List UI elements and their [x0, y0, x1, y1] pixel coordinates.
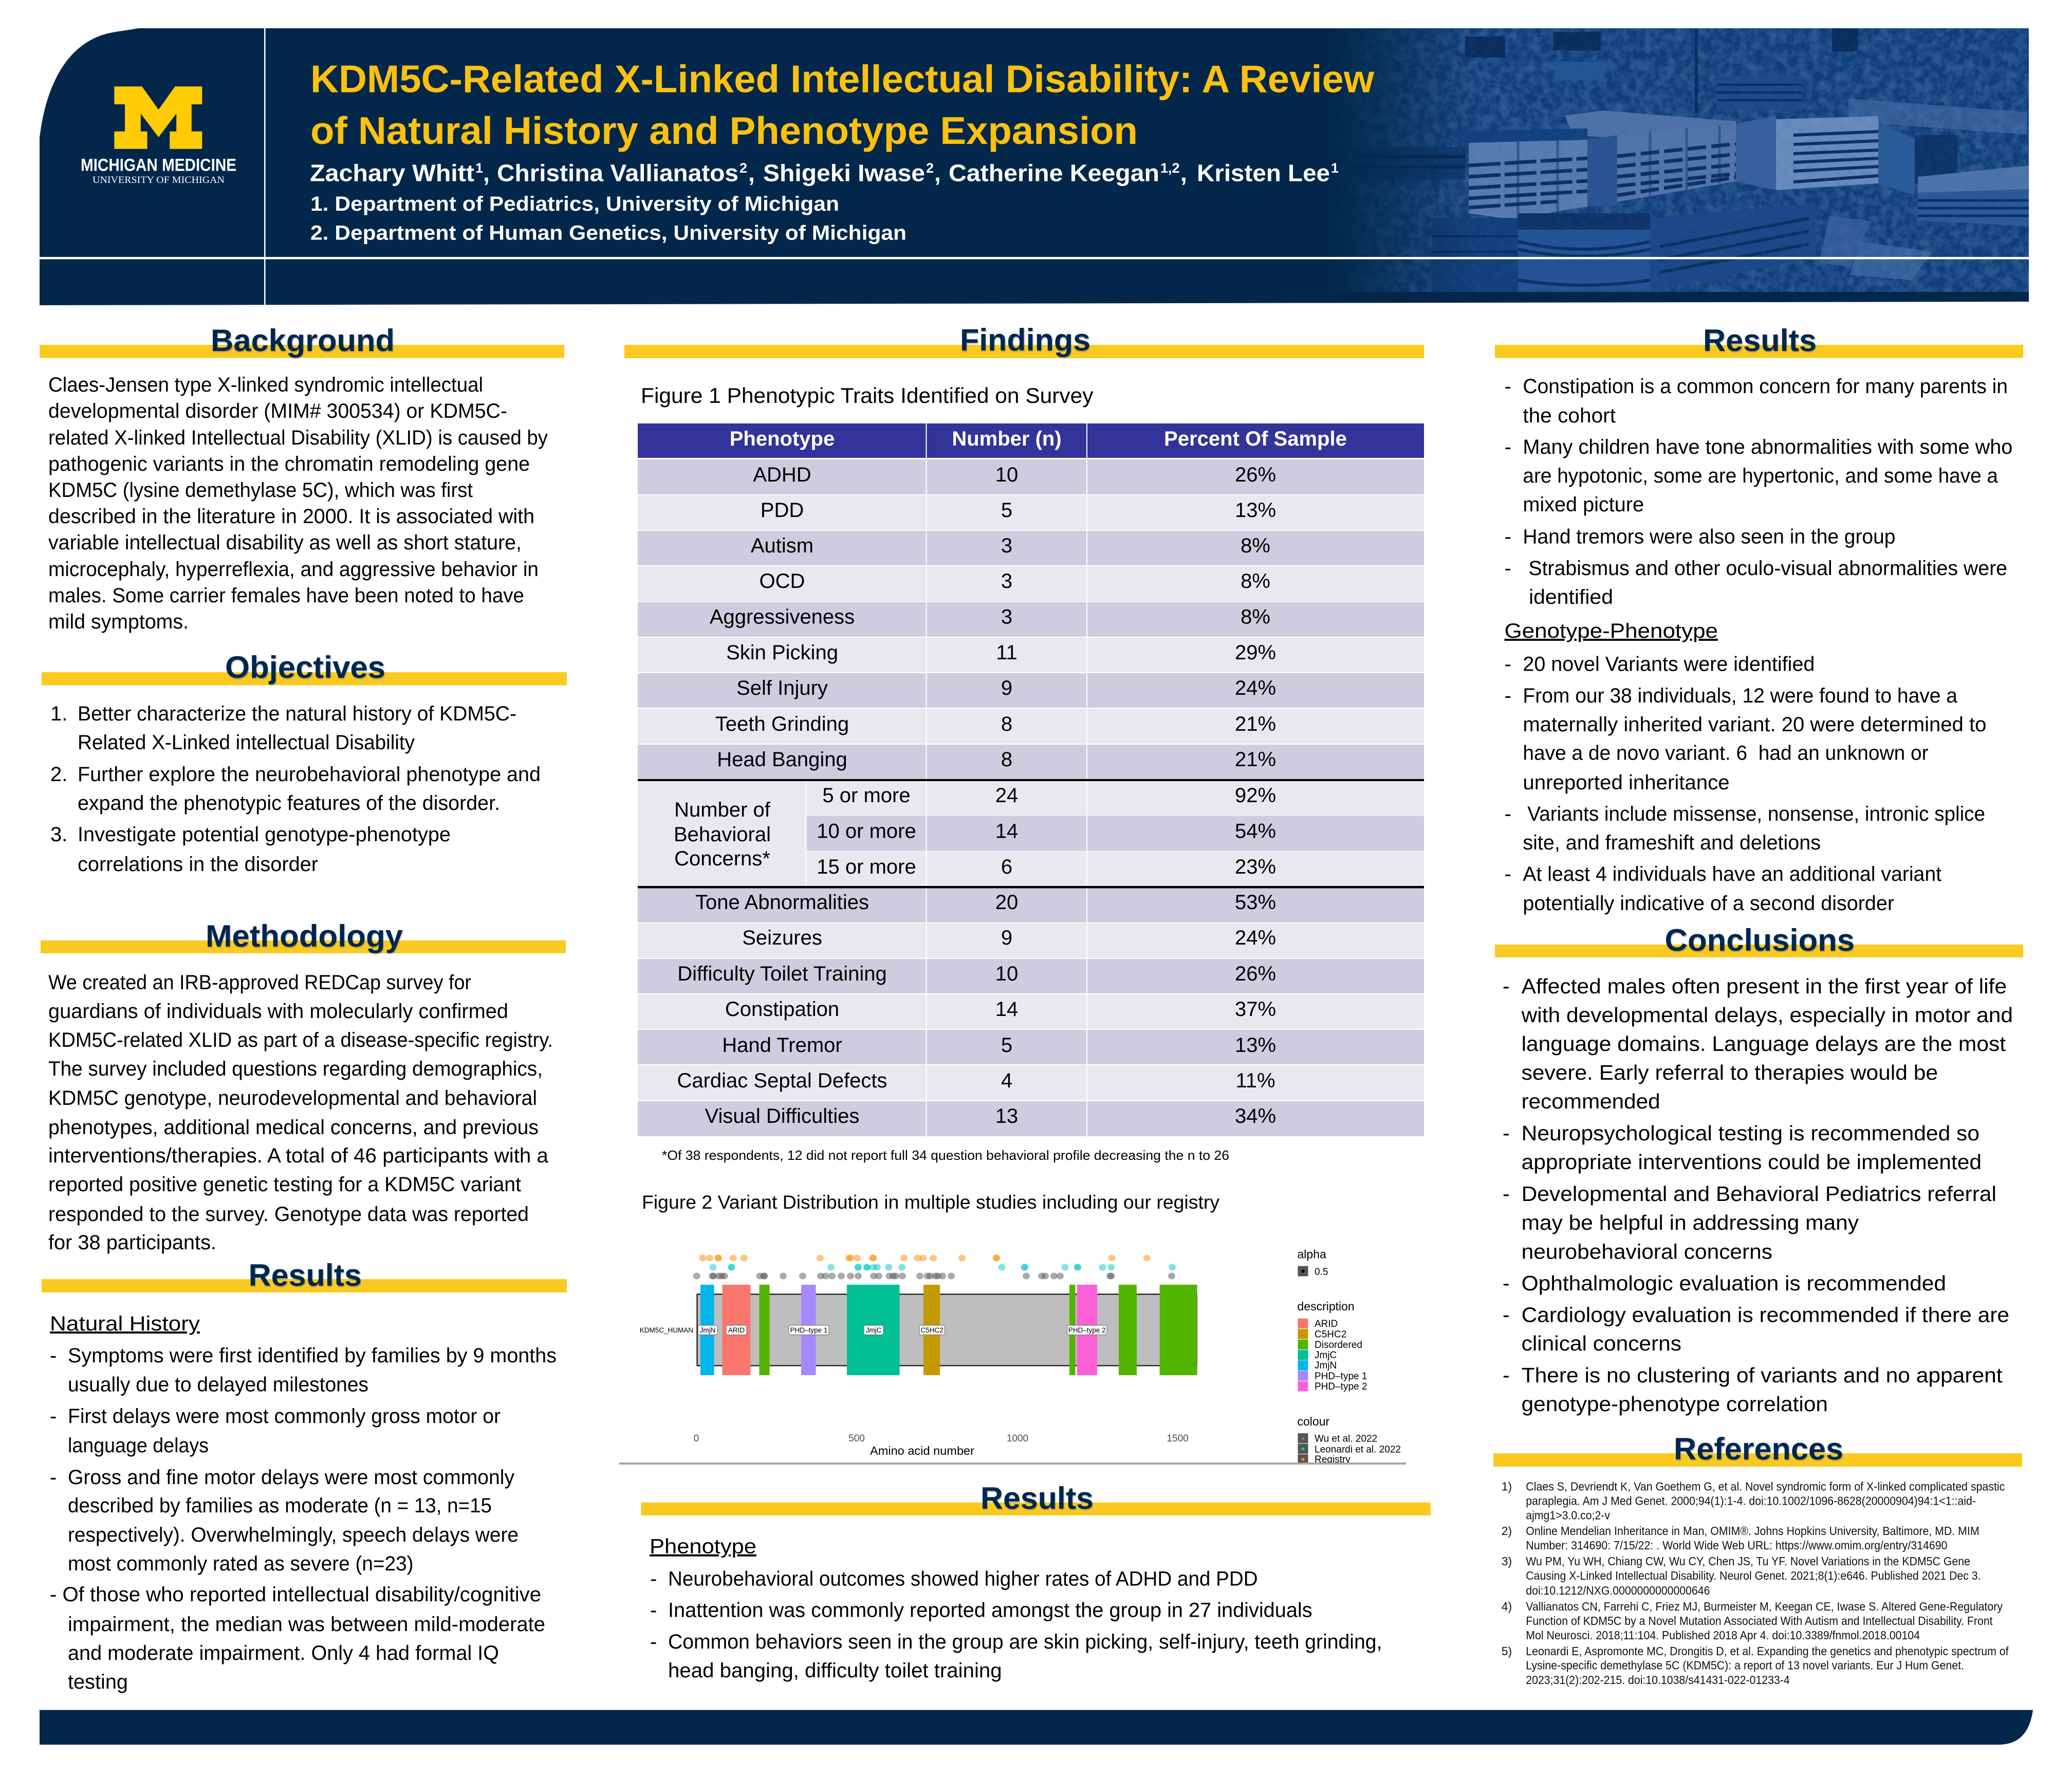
list: references: 2): [1502, 1524, 1512, 1538]
header banner: [40, 28, 2029, 306]
table: phenotypic traits: 10: [995, 963, 1018, 985]
table: phenotypic traits: 5 or more: [822, 784, 911, 807]
table: phenotypic traits: 5: [1001, 499, 1012, 522]
list: conclusions: language domains. Language delays are the most: [1522, 1032, 2006, 1056]
table: phenotypic traits: Autism: [751, 534, 813, 557]
text: methodology paragraph: reported positive genetic testing for a KDM5C variant: [48, 1173, 521, 1196]
figure 2 caption: Figure 2 Variant Distribution in multiple studies including our registry: [642, 1192, 1219, 1213]
authors: 2: [739, 160, 747, 176]
table: phenotypic traits: 13%: [1235, 1034, 1276, 1057]
heading: results: Results: [980, 1481, 1094, 1515]
x axis: Amino acid number: [870, 1444, 974, 1457]
list: genotype results: unreported inheritance: [1523, 771, 1730, 794]
panel: results natural history: [42, 1258, 567, 1693]
panel: background: [40, 323, 564, 633]
panel: objectives: [42, 650, 567, 876]
table: phenotypic traits: 20: [995, 891, 1018, 914]
list: genotype results: From our 38 individuals, 12 were found to have a: [1523, 684, 1958, 707]
heading: references: References: [1674, 1432, 1843, 1466]
heading: background: [40, 323, 564, 358]
heading: results: Results: [1703, 323, 1817, 358]
authors: 1,2: [1160, 160, 1180, 176]
table: phenotypic traits: 5: [1001, 1034, 1012, 1057]
list: conclusions: -: [1503, 1271, 1510, 1295]
legend: description: JmjN: [1315, 1360, 1337, 1371]
text: background paragraph: pathogenic variants in the chromatin remodeling gene: [48, 453, 530, 475]
table: phenotypic traits: 6: [1001, 856, 1012, 878]
domain labels: ARID: [728, 1326, 745, 1334]
list: phenotype results: -: [650, 1631, 657, 1653]
table: phenotypic traits: 13%: [1235, 499, 1276, 522]
list: phenotype results: [650, 1568, 1382, 1682]
table: phenotypic traits: 92%: [1235, 784, 1276, 807]
list: conclusions: -: [1503, 974, 1510, 998]
list: clinical results: -: [1505, 375, 1511, 398]
list: references: Lysine-specific demethylase 5C (KDM5C): a report of 13 novel variants. Eur J Hum Genet.: [1526, 1659, 1964, 1672]
list: phenotype results: Neurobehavioral outcomes showed higher rates of ADHD and PDD: [668, 1568, 1258, 1590]
list: natural history findings: Gross and fine motor delays were most commonly: [68, 1466, 514, 1489]
list: conclusions: appropriate interventions could be implemented: [1522, 1150, 1982, 1174]
footer band: [40, 1710, 2033, 1745]
table: phenotypic traits: Visual Difficulties: [705, 1105, 859, 1127]
list: genotype results: -: [1505, 684, 1511, 707]
list: natural history findings: impairment, the median was between mild-moderate: [68, 1613, 545, 1636]
domain labels: KDM5C_HUMAN: [640, 1326, 693, 1334]
list: natural history findings: and moderate impairment. Only 4 had formal IQ: [68, 1642, 499, 1664]
list: conclusions: Ophthalmologic evaluation is recommended: [1522, 1271, 1946, 1295]
table: phenotypic traits: 23%: [1235, 856, 1276, 878]
table: phenotypic traits: Seizures: [742, 927, 822, 949]
subheading: genotype-phenotype: Genotype-Phenotype: [1505, 620, 1718, 642]
domain labels: PHD–type 1: [790, 1326, 827, 1334]
title: [310, 58, 1375, 152]
list: objectives: 1.: [50, 702, 67, 725]
table: phenotypic traits: 13: [995, 1105, 1018, 1127]
list: genotype results: At least 4 individuals have an additional variant: [1523, 863, 1941, 885]
table: phenotypic traits: Skin Picking: [726, 641, 838, 664]
list: clinical results: the cohort: [1523, 404, 1616, 427]
affiliations: 1. Department of Pediatrics, University of Michigan: [310, 193, 839, 215]
title: KDM5C-Related X-Linked Intellectual Disability: A Review: [310, 58, 1375, 101]
authors: 2: [926, 160, 934, 176]
text: background paragraph: [48, 374, 548, 633]
list: references: 4): [1502, 1600, 1512, 1613]
table: phenotypic traits: 26%: [1235, 464, 1276, 486]
affiliations: 2. Department of Human Genetics, University of Michigan: [310, 222, 906, 245]
text: background paragraph: described in the literature in 2000. It is associated with: [48, 505, 534, 528]
list: natural history findings: usually due to delayed milestones: [68, 1373, 368, 1396]
protein body and domains: [697, 1285, 1197, 1375]
legend: description: ARID: [1315, 1319, 1338, 1329]
variant dots: registry: [699, 1255, 1151, 1261]
text: background paragraph: mild symptoms.: [48, 610, 189, 633]
table: phenotypic traits: 3: [1001, 605, 1012, 628]
text: background paragraph: Claes-Jensen type X-linked syndromic intellectual: [48, 374, 483, 396]
logo: Michigan Medicine: UNIVERSITY OF MICHIGAN: [92, 175, 225, 186]
list: phenotype results: head banging, difficulty toilet training: [668, 1659, 1002, 1682]
list: references: Vallianatos CN, Farrehi C, Friez MJ, Burmeister M, Keegan CE, Iwase S. Altered Gene-Regulatory: [1526, 1600, 2003, 1613]
domain labels: C5HC2: [921, 1326, 943, 1334]
table: phenotypic traits: Difficulty Toilet Training: [677, 963, 887, 985]
text: methodology paragraph: The survey included questions regarding demographics,: [48, 1058, 543, 1080]
list: conclusions: neurobehavioral concerns: [1522, 1239, 1772, 1263]
table: phenotypic traits: 8: [1001, 748, 1012, 771]
legend: colour: colour: [1297, 1415, 1329, 1428]
list: conclusions: genotype-phenotype correlation: [1522, 1392, 1828, 1416]
list: objectives: Better characterize the natural history of KDM5C-: [78, 702, 516, 725]
list: conclusions: -: [1503, 1303, 1510, 1327]
heading: conclusions: Conclusions: [1665, 923, 1855, 957]
authors: Christina Vallianatos: [497, 160, 738, 187]
table: phenotypic traits: 24%: [1235, 677, 1276, 699]
table: phenotypic traits: 10 or more: [817, 820, 916, 843]
list: objectives: 2.: [50, 763, 67, 786]
table: phenotypic traits: Tone Abnormalities: [695, 891, 869, 914]
list: conclusions: may be helpful in addressing many: [1522, 1211, 1859, 1234]
list: conclusions: Developmental and Behavioral Pediatrics referral: [1522, 1182, 1996, 1206]
list: natural history findings: testing: [68, 1671, 128, 1693]
list: conclusions: There is no clustering of variants and no apparent: [1522, 1363, 2003, 1387]
subheading: natural history: Natural History: [50, 1312, 200, 1335]
text: background paragraph: KDM5C (lysine demethylase 5C), which was first: [48, 479, 473, 502]
table: phenotypic traits: 11%: [1235, 1069, 1275, 1092]
list: objectives: correlations in the disorder: [78, 853, 318, 876]
x axis: 1500: [1167, 1433, 1189, 1444]
table: phenotypic traits: 54%: [1235, 820, 1276, 843]
list: genotype results: -: [1505, 863, 1511, 885]
table: phenotypic traits: 14: [995, 998, 1018, 1021]
text: methodology paragraph: interventions/therapies. A total of 46 participants with a: [48, 1144, 549, 1167]
list: genotype results: -: [1505, 803, 1511, 825]
list: genotype results: -: [1505, 653, 1511, 675]
list: objectives: expand the phenotypic features of the disorder.: [78, 792, 500, 815]
table footnote: *Of 38 respondents, 12 did not report full 34 question behavioral profile decreasing the n to 26: [662, 1148, 1229, 1163]
table: phenotypic traits: 3: [1001, 534, 1012, 557]
variant dots: Wu et al.: [693, 1272, 1175, 1280]
list: conclusions: recommended: [1522, 1089, 1660, 1113]
table: phenotypic traits: 21%: [1235, 713, 1276, 735]
list: conclusions: Affected males often present in the first year of life: [1522, 974, 2007, 998]
table: phenotypic traits: 37%: [1235, 998, 1276, 1021]
text: methodology paragraph: KDM5C-related XLID as part of a disease-specific registry.: [48, 1029, 553, 1051]
list: genotype results: have a de novo variant. 6 had an unknown or: [1523, 742, 1929, 765]
list: genotype results: potentially indicative of a second disorder: [1523, 892, 1894, 915]
domain labels: JmjN: [700, 1326, 715, 1334]
legend: description: PHD–type 2: [1315, 1381, 1367, 1392]
heading: results: [1495, 323, 2023, 358]
list: references: Online Mendelian Inheritance in Man, OMIM®. Johns Hopkins University, Baltimore, MD. MIM: [1526, 1524, 1979, 1538]
legend: colour: [1297, 1415, 1401, 1465]
panel: conclusions: [1495, 923, 2023, 1416]
list: clinical results: Many children have tone abnormalities with some who: [1523, 436, 2012, 458]
table: phenotypic traits: 15 or more: [817, 856, 916, 878]
list: references: 3): [1502, 1555, 1512, 1568]
list: references: Number: 314690: 7/15/22: . World Wide Web URL: https://www.omim.org/entry/314690: [1526, 1539, 1948, 1552]
heading: methodology: Methodology: [206, 919, 403, 953]
text: methodology paragraph: KDM5C genotype, neurodevelopmental and behavioral: [48, 1087, 537, 1109]
legend: colour: Registry: [1315, 1454, 1350, 1465]
table: phenotypic traits: Self Injury: [736, 677, 828, 699]
list: phenotype results: -: [650, 1568, 657, 1590]
list: clinical results: identified: [1529, 586, 1613, 608]
list: conclusions: [1503, 974, 2013, 1416]
list: references: ajmg1>3.0.co;2-v: [1526, 1509, 1610, 1522]
text: methodology paragraph: guardians of individuals with molecularly confirmed: [48, 1000, 508, 1023]
list: conclusions: -: [1503, 1363, 1510, 1387]
list: conclusions: clinical concerns: [1522, 1331, 1681, 1355]
list: natural history findings: most commonly rated as severe (n=23): [68, 1552, 413, 1575]
table: phenotypic traits: 24: [995, 784, 1018, 807]
panel: results genotype: [1495, 323, 2023, 915]
text: methodology paragraph: phenotypes, additional medical concerns, and previous: [48, 1116, 539, 1139]
panel: references: [1493, 1432, 2022, 1687]
heading: findings: [624, 323, 1424, 358]
text: methodology paragraph: [48, 971, 553, 1254]
list: conclusions: with developmental delays, especially in motor and: [1521, 1003, 2013, 1027]
list: references: Wu PM, Yu WH, Chiang CW, Wu CY, Chen JS, Tu YF. Novel Variations in the KDM5C Gene: [1526, 1555, 1970, 1568]
chart: variant distribution on KDM5C protein: [619, 1248, 1406, 1465]
list: clinical results: mixed picture: [1523, 493, 1644, 516]
table: phenotypic traits: Hand Tremor: [722, 1034, 842, 1057]
heading: results: [641, 1481, 1431, 1515]
panel: findings: [619, 323, 1424, 1465]
list: natural history findings: [50, 1344, 557, 1693]
table: phenotypic traits: 9: [1001, 677, 1012, 699]
hospital photo: [1285, 28, 2029, 292]
table: phenotypic traits: Behavioral: [674, 823, 771, 846]
list: references: doi:10.1212/NXG.0000000000000646: [1526, 1584, 1710, 1597]
text: methodology paragraph: for 38 participants.: [48, 1231, 216, 1254]
list: natural history findings: -: [50, 1344, 57, 1367]
legend: colour: Wu et al. 2022: [1315, 1434, 1377, 1445]
list: conclusions: Neuropsychological testing is recommended so: [1522, 1121, 1979, 1145]
logo: Michigan Medicine: MICHIGAN MEDICINE: [81, 156, 236, 175]
list: genotype results: site, and frameshift and deletions: [1523, 831, 1821, 854]
table: phenotypic traits: Phenotype: [730, 428, 835, 450]
list: natural history findings: First delays were most commonly gross motor or: [68, 1405, 501, 1428]
table: phenotypic traits: Number of: [674, 799, 771, 821]
table: phenotypic traits: Number (n): [952, 428, 1062, 450]
authors: ,: [483, 160, 490, 187]
logo: Michigan Medicine: [81, 86, 236, 186]
list: genotype results: 20 novel Variants were identified: [1523, 653, 1815, 675]
authors: Catherine Keegan: [949, 160, 1159, 187]
list: references: [1502, 1480, 2009, 1687]
table: phenotypic traits: Head Banging: [717, 748, 847, 771]
list: references: Leonardi E, Aspromonte MC, Drongitis D, et al. Expanding the genetics and phenotypic spectrum of: [1526, 1644, 2009, 1658]
legend: alpha: 0.5: [1315, 1267, 1328, 1278]
authors: Shigeki Iwase: [763, 160, 925, 187]
table: phenotypic traits: PDD: [761, 499, 804, 522]
list: clinical results: -: [1505, 526, 1511, 548]
list: clinical results: -: [1505, 436, 1511, 458]
x axis: 1000: [1007, 1433, 1028, 1444]
list: references: Causing X-Linked Intellectual Disability. Neurol Genet. 2021;8(1):e646. Published 2021 Dec 3.: [1526, 1569, 1981, 1582]
legend: colour: Leonardi et al. 2022: [1315, 1444, 1401, 1455]
panel: methodology: [41, 919, 566, 1254]
legend: description: PHD–type 1: [1315, 1371, 1367, 1382]
list: genotype results: maternally inherited variant. 20 were determined to: [1523, 713, 1986, 736]
legend: alpha: [1297, 1248, 1328, 1278]
x axis: 500: [848, 1433, 865, 1444]
authors: Kristen Lee: [1197, 160, 1330, 187]
table: phenotypic traits: 21%: [1235, 748, 1276, 771]
table: phenotypic traits: 53%: [1235, 891, 1276, 914]
heading: objectives: Objectives: [225, 650, 385, 684]
list: natural history findings: -: [50, 1466, 57, 1489]
heading: results: [42, 1258, 567, 1292]
list: genotype results: Variants include missense, nonsense, intronic splice: [1527, 803, 1985, 825]
heading: methodology: [41, 919, 566, 953]
text: methodology paragraph: We created an IRB-approved REDCap survey for: [48, 971, 471, 994]
text: methodology paragraph: responded to the survey. Genotype data was reported: [48, 1203, 529, 1226]
legend: description: [1297, 1300, 1367, 1392]
heading: results: Results: [249, 1258, 362, 1292]
table: phenotypic traits: 8%: [1241, 605, 1270, 628]
list: natural history findings: respectively). Overwhelmingly, speech delays were: [68, 1524, 519, 1546]
list: genotype results: [1505, 653, 1986, 915]
list: natural history findings: described by families as moderate (n = 13, n=15: [68, 1494, 492, 1517]
table: phenotypic traits: 24%: [1235, 927, 1276, 949]
legend: description: Disordered: [1315, 1340, 1362, 1350]
domain labels: PHD–type 2: [1068, 1326, 1106, 1334]
domain labels: JmjC: [866, 1326, 882, 1334]
authors: 1: [1331, 160, 1339, 176]
text: background paragraph: males. Some carrier females have been noted to have: [48, 584, 524, 607]
heading: findings: Findings: [960, 323, 1090, 357]
list: references: Claes S, Devriendt K, Van Goethem G, et al. Novel syndromic form of X-linked complicated spastic: [1526, 1480, 2005, 1493]
list: clinical results: Constipation is a common concern for many parents in: [1523, 375, 2008, 398]
text: background paragraph: microcephaly, hyperreflexia, and aggressive behavior in: [48, 558, 539, 581]
table: phenotypic traits: Cardiac Septal Defects: [677, 1069, 887, 1092]
affiliations: [310, 193, 906, 245]
list: phenotype results: Common behaviors seen in the group are skin picking, self-injury, teeth grinding,: [668, 1631, 1382, 1653]
table: phenotypic traits: 29%: [1235, 641, 1276, 664]
authors: ,: [1180, 160, 1187, 187]
table: phenotypic traits: Teeth Grinding: [715, 713, 849, 735]
list: natural history findings: Symptoms were first identified by families by 9 months: [68, 1344, 557, 1367]
list: natural history findings: language delays: [68, 1434, 209, 1457]
table: phenotypic traits: 10: [995, 464, 1018, 486]
legend: description: JmjC: [1315, 1350, 1337, 1361]
list: objectives: Related X-Linked intellectual Disability: [78, 731, 415, 754]
list: phenotype results: -: [650, 1599, 657, 1622]
legend: description: C5HC2: [1315, 1329, 1346, 1340]
list: conclusions: -: [1503, 1182, 1510, 1206]
panel: results phenotype: [641, 1481, 1431, 1682]
list: objectives: Further explore the neurobehavioral phenotype and: [78, 763, 541, 786]
table: phenotypic traits: Aggressiveness: [710, 605, 855, 628]
x axis: 0: [694, 1433, 699, 1444]
list: references: paraplegia. Am J Med Genet. 2000;94(1):1-4. doi:10.1002/1096-8628(20000904)94:1<1::aid-: [1526, 1494, 1976, 1508]
table: phenotypic traits: 8: [1001, 713, 1012, 735]
list: references: Mol Neurosci. 2018;11:104. Published 2018 Apr 4. doi:10.3389/fnmol.2018.00104: [1526, 1629, 1920, 1642]
table: phenotypic traits: 26%: [1235, 963, 1276, 985]
table: phenotypic traits: 8%: [1241, 534, 1270, 557]
heading: background: Background: [211, 323, 395, 358]
list: references: 5): [1502, 1644, 1512, 1658]
list: clinical results: [1505, 375, 2012, 608]
legend: description: description: [1297, 1300, 1355, 1313]
authors: [310, 160, 1339, 187]
list: objectives: Investigate potential genotype-phenotype: [78, 823, 451, 846]
table: phenotypic traits: 9: [1001, 927, 1012, 949]
list: references: 2023;31(2):202-215. doi:10.1038/s41431-022-01233-4: [1526, 1673, 1790, 1687]
title: of Natural History and Phenotype Expansion: [310, 109, 1138, 152]
list: clinical results: are hypotonic, some are hypertonic, and some have a: [1523, 465, 1999, 487]
list: references: 1): [1502, 1480, 1512, 1493]
authors: ,: [748, 160, 755, 187]
table: phenotypic traits: [638, 423, 1424, 1136]
table: phenotypic traits: 3: [1001, 570, 1012, 593]
list: phenotype results: Inattention was commonly reported amongst the group in 27 individuals: [668, 1599, 1312, 1622]
list: clinical results: Hand tremors were also seen in the group: [1523, 526, 1895, 548]
list: clinical results: Strabismus and other oculo-visual abnormalities were: [1528, 557, 2007, 580]
table: phenotypic traits: Percent Of Sample: [1164, 428, 1347, 450]
table: phenotypic traits: 34%: [1235, 1105, 1276, 1127]
heading: objectives: [42, 650, 567, 686]
list: conclusions: -: [1503, 1121, 1510, 1145]
table: phenotypic traits: 14: [995, 820, 1018, 843]
list: natural history findings: -: [50, 1405, 57, 1428]
authors: Zachary Whitt: [310, 160, 474, 187]
header grid lines: [40, 28, 2029, 306]
table: phenotypic traits: 11: [996, 641, 1017, 664]
authors: 1: [475, 160, 483, 176]
text: background paragraph: variable intellectual disability as well as short stature,: [48, 531, 522, 554]
table: phenotypic traits: ADHD: [753, 464, 811, 486]
figure 1 caption: Figure 1 Phenotypic Traits Identified on Survey: [641, 383, 1094, 408]
domain labels: [640, 1325, 1107, 1335]
heading: references: [1493, 1432, 2022, 1467]
list: objectives: 3.: [50, 823, 67, 846]
table: phenotypic traits: Concerns*: [674, 847, 770, 870]
list: objectives: [50, 702, 541, 876]
text: background paragraph: related X-linked Intellectual Disability (XLID) is caused by: [48, 427, 548, 449]
list: natural history findings: - Of those who reported intellectual disability/cognitive: [50, 1583, 541, 1606]
list: references: Function of KDM5C by a Novel Mutation Associated With Autism and Intellectual Disability. Front: [1526, 1614, 1993, 1627]
variant dots: Leonardi et al.: [709, 1264, 1176, 1270]
subheading: phenotype: Phenotype: [650, 1535, 756, 1558]
heading: conclusions: [1495, 923, 2023, 957]
x axis: [694, 1433, 1189, 1457]
legend: alpha: alpha: [1297, 1248, 1326, 1261]
text: background paragraph: developmental disorder (MIM# 300534) or KDM5C-: [48, 400, 507, 422]
table: phenotypic traits: OCD: [760, 570, 805, 593]
list: conclusions: severe. Early referral to therapies would be: [1522, 1061, 1938, 1084]
list: clinical results: -: [1505, 557, 1511, 580]
table: phenotypic traits: 8%: [1241, 570, 1270, 593]
table: phenotypic traits: Constipation: [725, 998, 839, 1021]
table: phenotypic traits: 4: [1001, 1069, 1012, 1092]
authors: ,: [934, 160, 941, 187]
list: conclusions: Cardiology evaluation is recommended if there are: [1522, 1303, 2009, 1327]
